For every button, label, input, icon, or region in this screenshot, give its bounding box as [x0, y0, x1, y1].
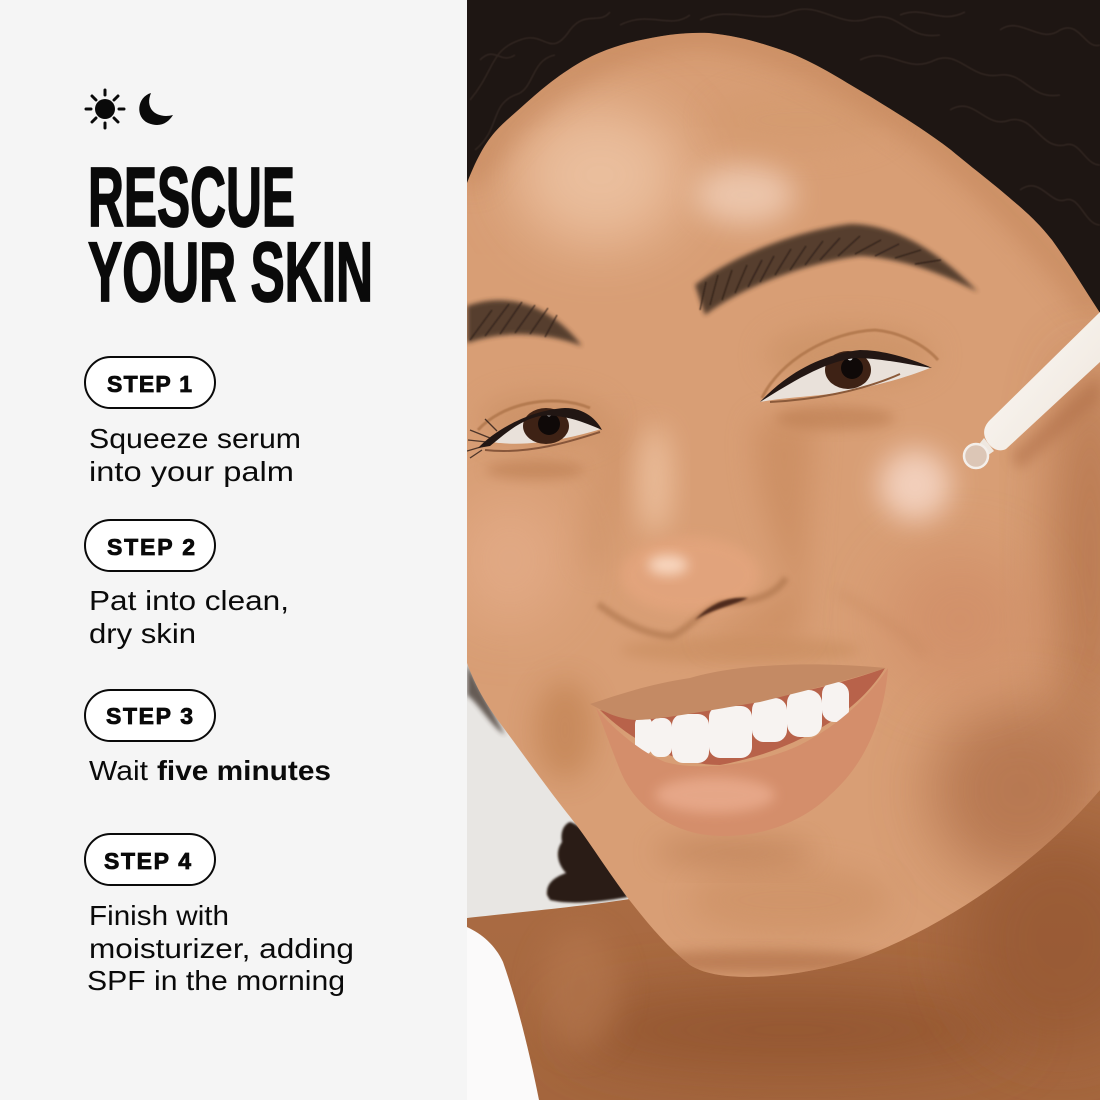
panel: instructions background [0, 0, 467, 1100]
title: YOUR SKIN [88, 225, 373, 319]
step 4 badge: STEP 4 [104, 848, 191, 874]
icon: moon [139, 93, 173, 125]
step 3 badge [85, 690, 215, 741]
dropper tube [984, 312, 1100, 450]
skin base [467, 0, 1100, 1000]
smile creases [838, 592, 925, 655]
step 1 badge: STEP 1 [107, 371, 192, 397]
hair: top [467, 0, 1100, 330]
hair: back curls near neck [547, 822, 628, 903]
hair wisps near jaw [467, 663, 505, 735]
photo backdrop [467, 664, 628, 918]
icon: sun [86, 90, 124, 128]
step 2 text [89, 585, 289, 649]
eyebrow: left [467, 300, 582, 346]
nose bridge and tip [580, 420, 815, 640]
neck shading [540, 830, 1100, 1070]
step 1 badge [85, 357, 215, 408]
photo: woman applying serum with dropper [455, 0, 1100, 1100]
face [455, 0, 1100, 1000]
step 2 badge [85, 520, 215, 571]
skin tones [455, 90, 1100, 974]
step 4 text: Finish with [89, 900, 229, 931]
eye: left [467, 401, 602, 458]
step 4 text [87, 900, 354, 996]
hair: strands highlight [470, 9, 1100, 225]
step 2 badge: STEP 2 [107, 534, 195, 560]
step 3 text [89, 755, 331, 786]
step 2 text: Pat into clean, [89, 585, 289, 616]
dropper tip [964, 438, 994, 468]
step 3 text: Wait [89, 755, 148, 786]
step 4 text: moisturizer, adding [89, 933, 354, 964]
dropper shadow [1010, 384, 1099, 468]
step 1 [85, 357, 301, 487]
step 2 text: dry skin [89, 618, 196, 649]
forehead edge shadow [467, 33, 1100, 313]
eyebrow: right [695, 224, 978, 315]
step 1 text: Squeeze serum [89, 423, 301, 454]
lower lip highlight [655, 777, 775, 813]
step 4 [85, 834, 354, 996]
step 3 badge: STEP 3 [106, 703, 193, 729]
teeth [635, 682, 849, 763]
white top strap [467, 927, 539, 1100]
dropper [964, 312, 1100, 468]
step 3 [85, 690, 331, 786]
title [88, 150, 373, 319]
step 1 text: into your palm [89, 456, 294, 487]
title: RESCUE [88, 150, 295, 244]
step 4 text: SPF in the morning [87, 965, 345, 996]
mouth [590, 664, 888, 836]
mouth interior [600, 668, 885, 765]
eye sockets [480, 325, 935, 480]
step 4 badge [85, 834, 215, 885]
lower lip [596, 668, 888, 836]
eye: right [760, 330, 938, 402]
step 1 text [89, 423, 301, 487]
step 2 [85, 520, 289, 649]
icons: day and night [86, 90, 173, 128]
shoulder and neck [467, 780, 1100, 1100]
step 3 text: five minutes [157, 755, 331, 786]
upper lip [590, 664, 886, 720]
